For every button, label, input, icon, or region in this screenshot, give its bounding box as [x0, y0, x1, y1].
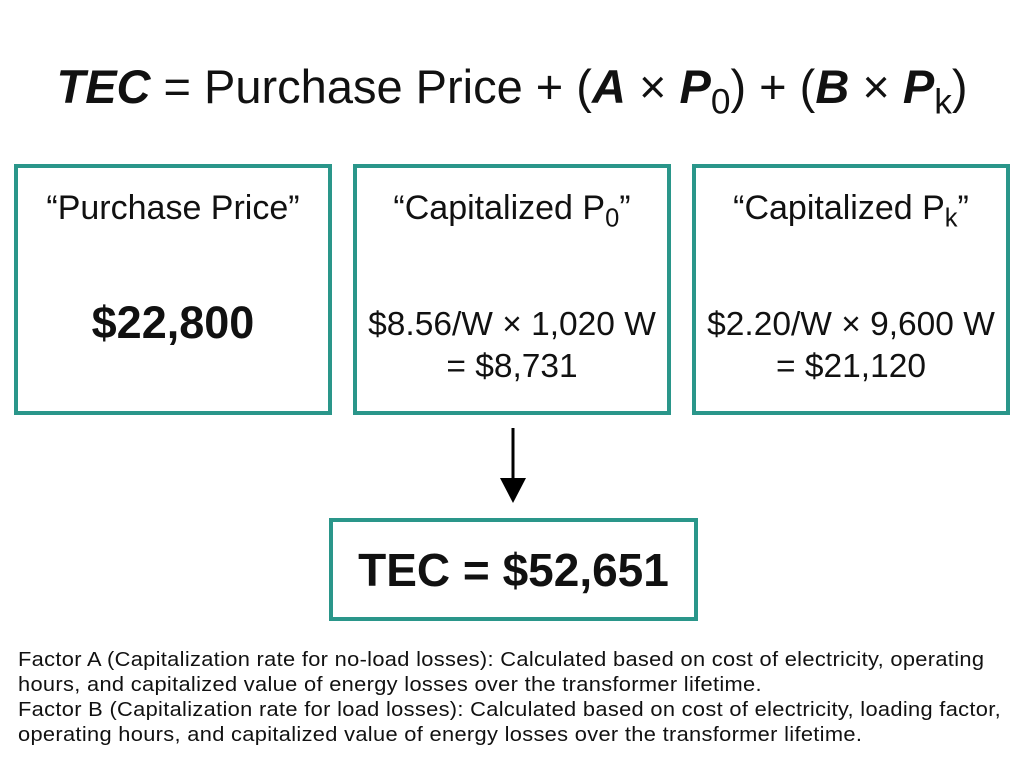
panel: capitalized P0: “Capitalized P0”: [393, 189, 631, 233]
panel: capitalized Pk: $2.20/W × 9,600 W: [707, 306, 995, 343]
panel: capitalized P0: $8.56/W × 1,020 W: [368, 306, 656, 343]
footnotes: Factor B (Capitalization rate for load losses): Calculated based on cost of electricity, loading factor,: [18, 698, 1001, 721]
result box: [329, 518, 698, 621]
footnotes: hours, and capitalized value of energy losses over the transformer lifetime.: [18, 673, 762, 696]
panel: purchase price: [14, 164, 332, 415]
footnotes: [18, 648, 1001, 746]
arrow: [500, 428, 526, 503]
footnotes: Factor A (Capitalization rate for no-load losses): Calculated based on cost of electricity, operating: [18, 648, 984, 671]
result box: TEC = $52,651: [358, 544, 669, 596]
panel: capitalized Pk: “Capitalized Pk”: [733, 189, 969, 233]
panel: capitalized Pk: = $21,120: [776, 348, 926, 385]
title: TEC = Purchase Price + (A × P0) + (B × Pk): [56, 60, 968, 122]
panel: capitalized Pk: [692, 164, 1010, 415]
panel: capitalized P0: [353, 164, 671, 415]
panel: capitalized P0: = $8,731: [446, 348, 578, 385]
panel: purchase price: “Purchase Price”: [46, 189, 300, 227]
footnotes: operating hours, and capitalized value of energy losses over the transformer lifetime.: [18, 723, 862, 746]
panel: purchase price: $22,800: [92, 297, 254, 348]
